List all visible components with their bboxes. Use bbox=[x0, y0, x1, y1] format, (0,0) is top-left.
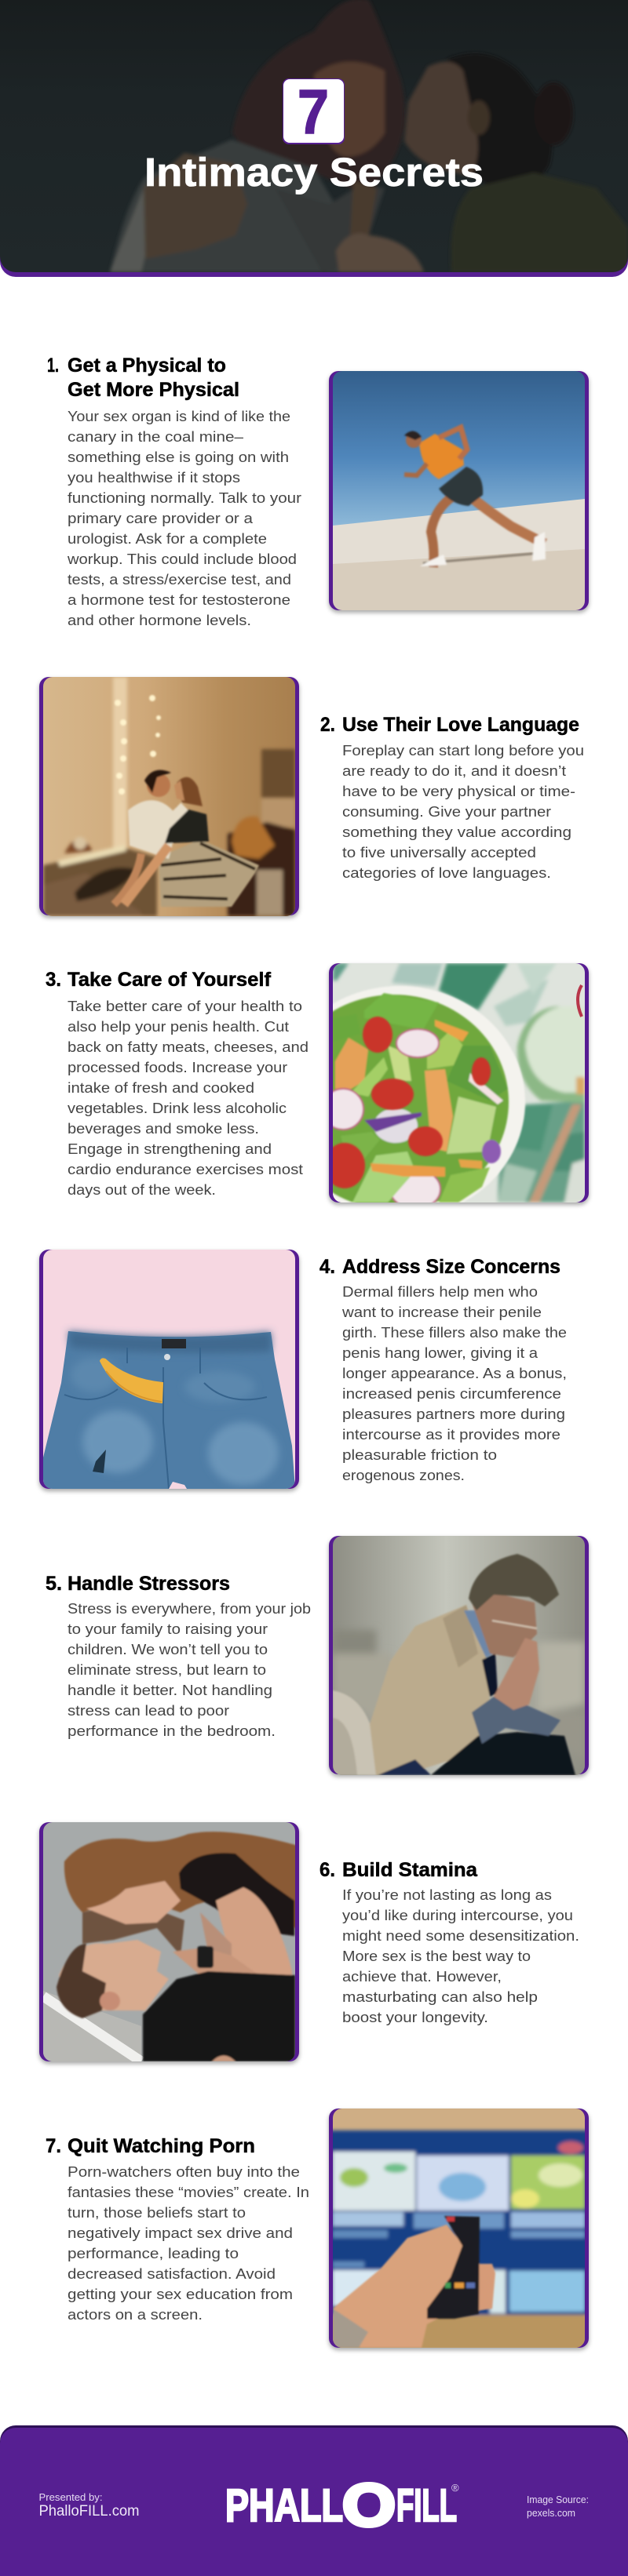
tip 1 text: Get More Physical bbox=[68, 379, 239, 401]
tip 1 text: Your sex organ is kind of like the bbox=[68, 409, 290, 424]
number badge bbox=[283, 77, 345, 147]
tip 1 text: primary care provider or a bbox=[68, 511, 254, 526]
tip 2 text: Foreplay can start long before you bbox=[342, 743, 584, 759]
tip 3 text: back on fatty meats, cheeses, and bbox=[68, 1039, 309, 1055]
tip 2 text: have to be very physical or time- bbox=[342, 784, 575, 799]
tip 5 text: performance in the bedroom. bbox=[68, 1723, 276, 1739]
tip 1 text: Get a Physical to bbox=[68, 355, 226, 377]
tip 4 text: girth. These fillers also make the bbox=[342, 1325, 567, 1341]
logo: PHALLOFILL bbox=[225, 2472, 459, 2539]
tip 1 text: canary in the coal mine– bbox=[68, 429, 243, 445]
logo: PHALLOFILL: PHALL bbox=[225, 2480, 343, 2531]
tip 5 text: stress can lead to poor bbox=[68, 1703, 229, 1719]
photo: laughing couple bbox=[39, 1822, 299, 2061]
tip 2 text bbox=[320, 714, 584, 881]
presented by: Presented by: bbox=[39, 2491, 102, 2503]
tip 2 text: consuming. Give your partner bbox=[342, 804, 551, 820]
title: Intimacy Secrets bbox=[144, 150, 484, 195]
header banner bbox=[0, 0, 628, 277]
image source: pexels.com bbox=[527, 2508, 575, 2519]
image source bbox=[527, 2494, 589, 2519]
tip 7 text: Quit Watching Porn bbox=[68, 2135, 255, 2157]
photo: salad bowl bbox=[327, 963, 592, 1208]
tip 5 text: Stress is everywhere, from your job bbox=[68, 1601, 311, 1617]
tip 2 text: are ready to do it, and it doesn’t bbox=[342, 763, 566, 779]
tip 6 text: Build Stamina bbox=[342, 1859, 478, 1881]
tip 4 text: increased penis circumference bbox=[342, 1386, 561, 1402]
tip 1 text: urologist. Ask for a complete bbox=[68, 531, 267, 547]
tip 2 text: categories of love languages. bbox=[342, 865, 551, 881]
tip 1 text: something else is going on with bbox=[68, 449, 289, 465]
tip 4 text: 4. bbox=[319, 1256, 335, 1278]
tip 7 text: performance, leading to bbox=[68, 2246, 239, 2261]
tip 4 text: pleasures partners more during bbox=[342, 1406, 565, 1422]
tip 7 text: actors on a screen. bbox=[68, 2307, 203, 2323]
presented by: PhalloFILL.com bbox=[39, 2503, 140, 2520]
logo: PHALLOFILL: O bbox=[342, 2472, 396, 2539]
tip 4 text: want to increase their penile bbox=[341, 1304, 542, 1320]
logo: PHALLOFILL: ® bbox=[451, 2482, 459, 2494]
tip 5 text: to your family to raising your bbox=[68, 1621, 268, 1637]
tip 6 text: masturbating can also help bbox=[342, 1989, 538, 2005]
tip 3 text: Take better care of your health to bbox=[68, 999, 302, 1014]
tip 6 text: boost your longevity. bbox=[342, 2010, 488, 2025]
tip 6 text: achieve that. However, bbox=[342, 1969, 502, 1985]
tip 6 text: 6. bbox=[319, 1859, 335, 1881]
photo: jeans and banana bbox=[39, 1250, 299, 1489]
tip 4 text: Address Size Concerns bbox=[342, 1256, 560, 1278]
tip 1 text: tests, a stress/exercise test, and bbox=[68, 572, 291, 588]
tip 5 text: eliminate stress, but learn to bbox=[68, 1662, 266, 1678]
tip 2 text: 2. bbox=[320, 714, 335, 736]
footer panel bbox=[0, 2425, 628, 2576]
tip 2 text: something they value according bbox=[342, 824, 571, 840]
photo: stressed man bbox=[329, 1536, 589, 1775]
tip 3 text: also help your penis health. Cut bbox=[68, 1019, 289, 1035]
tip 5 text: children. We won’t tell you to bbox=[68, 1642, 268, 1657]
logo: PHALLOFILL: FILL bbox=[396, 2480, 457, 2531]
tip 3 text: Take Care of Yourself bbox=[68, 969, 272, 991]
tip 3 text: processed foods. Increase your bbox=[68, 1060, 287, 1075]
number badge: 7 bbox=[298, 77, 329, 147]
tip 4 text: Dermal fillers help men who bbox=[342, 1284, 538, 1300]
tip 4 text: penis hang lower, giving it a bbox=[342, 1345, 539, 1361]
tip 7 text: fantasies these “movies” create. In bbox=[68, 2185, 309, 2200]
tip 7 text: getting your sex education from bbox=[68, 2287, 293, 2302]
tip 1 text: workup. This could include blood bbox=[67, 551, 297, 567]
tip 4 text: longer appearance. As a bonus, bbox=[342, 1366, 567, 1381]
tip 1 text bbox=[47, 355, 301, 628]
tip 1 text: a hormone test for testosterone bbox=[68, 592, 290, 608]
tip 3 text: vegetables. Drink less alcoholic bbox=[68, 1101, 287, 1116]
tip 4 text: erogenous zones. bbox=[342, 1468, 465, 1483]
tip 7 text: decreased satisfaction. Avoid bbox=[68, 2266, 276, 2282]
tip 5 text: Handle Stressors bbox=[68, 1573, 230, 1595]
tip 1 text: you healthwise if it stops bbox=[68, 470, 240, 486]
photo: TV remote bbox=[329, 2108, 589, 2351]
tip 5 text: handle it better. Not handling bbox=[68, 1683, 272, 1698]
tip 5 text: 5. bbox=[46, 1573, 62, 1595]
photo: runner bbox=[329, 371, 589, 610]
tip 5 text bbox=[46, 1573, 311, 1739]
tip 3 text: intake of fresh and cooked bbox=[68, 1080, 254, 1096]
tip 7 text: 7. bbox=[46, 2135, 61, 2157]
tip 3 text: Engage in strengthening and bbox=[68, 1141, 272, 1157]
image source: Image Source: bbox=[527, 2494, 589, 2505]
tip 3 text: days out of the week. bbox=[68, 1182, 216, 1198]
tip 6 text bbox=[319, 1859, 579, 2025]
tip 6 text: If you’re not lasting as long as bbox=[342, 1887, 552, 1903]
tip 7 text: negatively impact sex drive and bbox=[68, 2225, 293, 2241]
tip 2 text: Use Their Love Language bbox=[342, 714, 579, 736]
tip 2 text: to five universally accepted bbox=[342, 845, 536, 860]
tip 7 text: Porn-watchers often buy into the bbox=[68, 2164, 300, 2180]
photo: couple in warm room bbox=[39, 677, 299, 916]
tip 7 text: turn, those beliefs start to bbox=[68, 2205, 246, 2221]
tip 3 text bbox=[46, 969, 309, 1198]
tip 4 text: pleasurable friction to bbox=[342, 1447, 497, 1463]
tip 3 text: beverages and smoke less. bbox=[68, 1121, 259, 1137]
tip 3 text: 3. bbox=[46, 969, 61, 991]
tip 6 text: you’d like during intercourse, you bbox=[342, 1908, 573, 1923]
tip 1 text: 1. bbox=[47, 355, 59, 377]
tip 4 text bbox=[319, 1256, 567, 1483]
presented by bbox=[39, 2491, 140, 2520]
tip 6 text: More sex is the best way to bbox=[342, 1948, 531, 1964]
tip 1 text: functioning normally. Talk to your bbox=[68, 490, 301, 506]
tip 6 text: might need some desensitization. bbox=[342, 1928, 579, 1944]
tip 4 text: intercourse as it provides more bbox=[342, 1427, 560, 1443]
tip 7 text bbox=[46, 2135, 309, 2323]
tip 3 text: cardio endurance exercises most bbox=[68, 1162, 303, 1177]
tip 1 text: and other hormone levels. bbox=[68, 613, 251, 628]
